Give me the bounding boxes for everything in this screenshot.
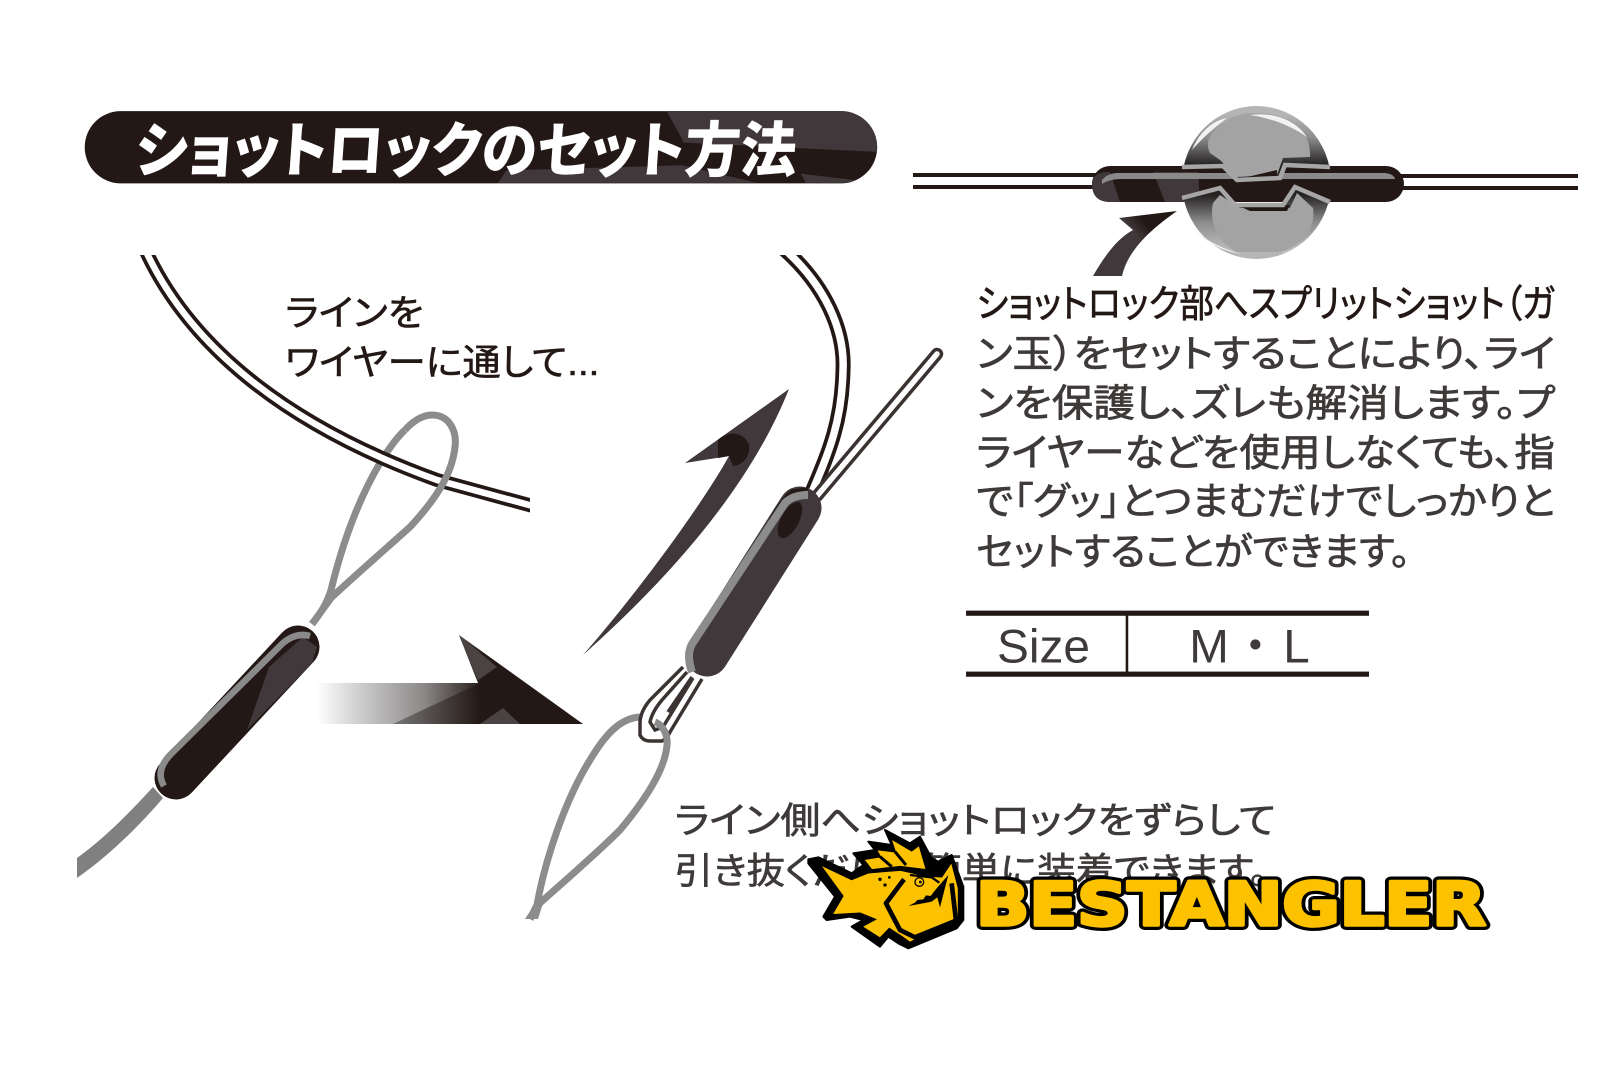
- description paragraph: で「グッ」とつまむだけでしっかりと: [976, 481, 1555, 524]
- tube 2: [689, 489, 808, 672]
- wire curve: [783, 248, 843, 492]
- spots: [878, 878, 882, 881]
- instruction text 2: 引き抜くだけで簡単に装着できます。: [675, 850, 1269, 891]
- double line: [913, 175, 1578, 188]
- step 1 illustration: wire loop through line: [77, 247, 540, 878]
- brow and eye: [910, 875, 939, 883]
- ball lower half: [1184, 190, 1328, 259]
- description paragraph: ライヤーなどを使用しなくても、指: [976, 432, 1555, 475]
- small wire eye: [640, 667, 702, 741]
- gill and jaw line: [886, 879, 956, 937]
- arrow: curved up arrow: [583, 389, 789, 655]
- dorsal fin: [863, 838, 927, 870]
- instruction text 2: [675, 800, 1276, 891]
- description paragraph: [976, 283, 1556, 574]
- size table: [966, 611, 1369, 677]
- instruction text 1: ワイヤーに通して...: [285, 342, 599, 383]
- lead line: [77, 787, 163, 878]
- instruction text 1: [285, 292, 599, 383]
- teeth: [908, 875, 948, 907]
- logo: wordmark: BESTANGLER: [976, 870, 1486, 940]
- loop right strand: [312, 415, 455, 624]
- arrow: gradient right arrow: [317, 635, 583, 724]
- logo: fish icon: [808, 830, 963, 948]
- description paragraph: ショットロック部へスプリットショット（ガ: [976, 283, 1555, 326]
- wire straight: [817, 354, 937, 496]
- size table: M: [1189, 620, 1229, 673]
- wire line: [144, 247, 540, 508]
- loop left strand: [312, 430, 405, 624]
- title text: ショットロックのセット方法: [133, 118, 799, 184]
- tube 1: [161, 635, 317, 786]
- ball upper half: [1184, 106, 1329, 178]
- curved arrow: [1093, 211, 1177, 276]
- logo: wordmark: BESTANGLER: [976, 870, 1486, 940]
- description paragraph: ンを保護し、ズレも解消します。プ: [976, 382, 1556, 425]
- body: [819, 862, 959, 943]
- split shot illustration: [913, 106, 1578, 276]
- step 2 illustration: tube on wire: [525, 248, 937, 919]
- size table: ・: [1232, 620, 1279, 673]
- instruction text 2: ライン側へショットロックをずらして: [675, 800, 1276, 841]
- line loop: [530, 717, 640, 919]
- description paragraph: ン玉）をセットすることにより、ライ: [976, 333, 1555, 376]
- description paragraph: セットすることができます。: [976, 531, 1410, 574]
- size table: Size: [997, 620, 1090, 673]
- instruction text 1: ラインを: [285, 292, 424, 333]
- tube horizontal: [1092, 166, 1404, 202]
- title banner: [85, 111, 877, 184]
- size table: L: [1283, 620, 1310, 673]
